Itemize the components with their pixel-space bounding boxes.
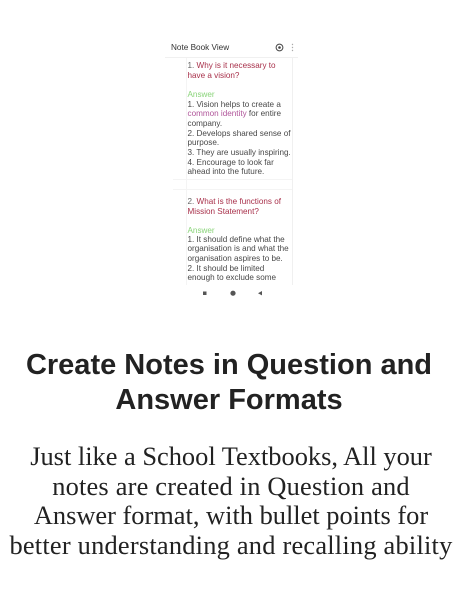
- answer 2 text: organisation is and what the: [188, 244, 289, 253]
- icon: stop: [203, 292, 206, 295]
- description: better understanding and recalling ability: [9, 530, 453, 560]
- question 2: 2. What is the functions of: [188, 197, 281, 206]
- answer 2 text: organisation aspires to be.: [188, 254, 283, 263]
- answer 1 text: purpose.: [188, 138, 219, 147]
- answer 1 text: 3. They are usually inspiring.: [188, 148, 291, 157]
- question 1: 1. Why is it necessary to: [188, 61, 276, 70]
- icon: home: [230, 291, 236, 296]
- heading: [26, 349, 432, 416]
- answer 2 text: enough to exclude some: [188, 273, 276, 282]
- navigation bar: [203, 290, 262, 296]
- answer 2 text: [188, 234, 289, 282]
- description: notes are created in Question and: [52, 470, 410, 500]
- description: Answer format, with bullet points for: [34, 500, 428, 530]
- app bar: [165, 40, 298, 58]
- answer 1 text: common identity for entire: [188, 109, 281, 118]
- question 1: have a vision?: [188, 71, 239, 80]
- answer 1 label: Answer: [188, 90, 215, 99]
- phone screenshot: [165, 43, 298, 285]
- question 2: Mission Statement?: [188, 207, 259, 216]
- notebook page: [173, 58, 293, 285]
- answer 2 text: 1. It should define what the: [188, 234, 285, 244]
- answer 2 text: 2. It should be limited: [188, 264, 264, 273]
- question 2: [188, 197, 282, 216]
- answer 1 text: [188, 100, 291, 176]
- question 1: [188, 61, 276, 80]
- answer 1 text: ahead into the future.: [188, 167, 264, 176]
- heading: Create Notes in Question and: [26, 349, 432, 381]
- icon: back: [258, 291, 262, 295]
- description: Just like a School Textbooks, All your: [30, 441, 432, 471]
- icon: more menu: [292, 44, 294, 52]
- heading: Answer Formats: [115, 384, 343, 416]
- answer 2 label: Answer: [188, 226, 215, 235]
- answer 1 text: company.: [188, 119, 222, 128]
- answer 1 text: 1. Vision helps to create a: [188, 100, 281, 108]
- icon: play circle: [276, 44, 284, 52]
- answer 1 text: 2. Develops shared sense of: [188, 129, 290, 138]
- app bar title: Note Book View: [171, 43, 229, 52]
- answer 1 text: 4. Encourage to look far: [188, 158, 274, 167]
- description: [9, 441, 453, 560]
